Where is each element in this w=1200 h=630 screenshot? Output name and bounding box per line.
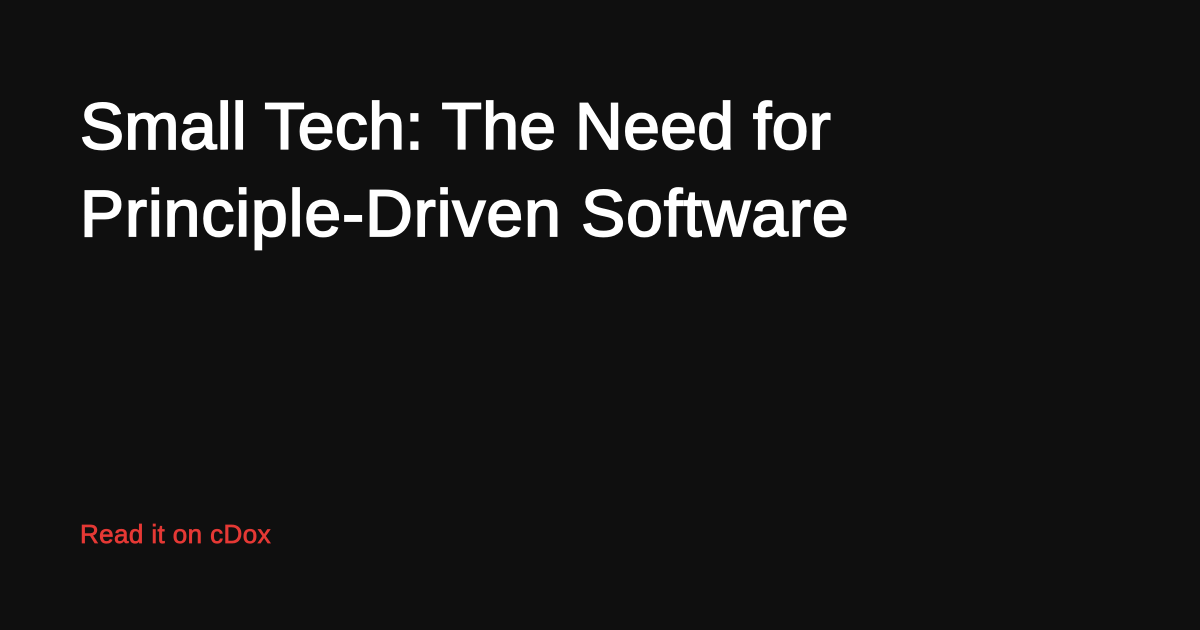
title: Principle-Driven Software [80,176,850,250]
call to action: Read it on cDox [80,519,271,549]
title: Small Tech: The Need for [80,88,831,162]
title [80,88,850,250]
